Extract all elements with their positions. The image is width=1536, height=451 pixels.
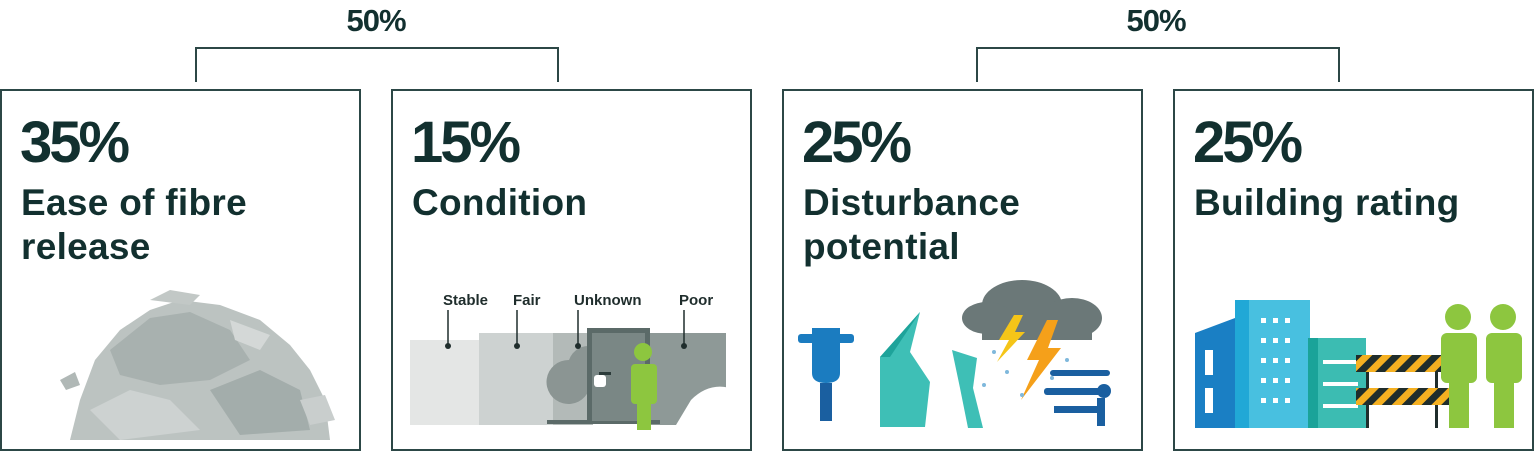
illustration: condition scale: Poor <box>679 292 713 309</box>
title: building rating: Building rating <box>1194 182 1460 223</box>
panel 4 content <box>1193 110 1522 428</box>
title: disturbance potential: potential <box>803 226 960 267</box>
title: disturbance potential <box>803 182 1020 267</box>
illustration: rubble pile <box>60 290 335 440</box>
percent 25: 25% <box>802 110 909 175</box>
percent 15: 15% <box>411 110 518 175</box>
illustration: disturbance hazards <box>798 280 1111 428</box>
illustration: buildings and people <box>1195 300 1522 428</box>
illustration: condition scale <box>410 292 726 430</box>
label: 50% right: 50% <box>1126 3 1186 38</box>
panel: condition <box>391 89 752 451</box>
percent 25: 25% <box>1193 110 1300 175</box>
panel 3 content <box>798 110 1111 428</box>
panel 1 content <box>20 110 335 440</box>
title: ease of fibre release: Ease of fibre <box>21 182 247 223</box>
panel: building rating <box>1173 89 1534 451</box>
bracket left <box>195 47 559 82</box>
bracket right <box>976 47 1340 82</box>
illustration: condition scale: Fair <box>513 292 541 309</box>
title: disturbance potential: Disturbance <box>803 182 1020 223</box>
panel: ease of fibre release <box>0 89 361 451</box>
illustration: condition scale: Stable <box>443 292 488 309</box>
title: ease of fibre release <box>21 182 247 267</box>
panel: disturbance potential <box>782 89 1143 451</box>
panel 2 content <box>410 110 726 430</box>
title: condition: Condition <box>412 182 587 223</box>
title: ease of fibre release: release <box>21 226 151 267</box>
label: 50% left: 50% <box>346 3 406 38</box>
percent 35: 35% <box>20 110 127 175</box>
illustration: condition scale: Unknown <box>574 292 642 309</box>
